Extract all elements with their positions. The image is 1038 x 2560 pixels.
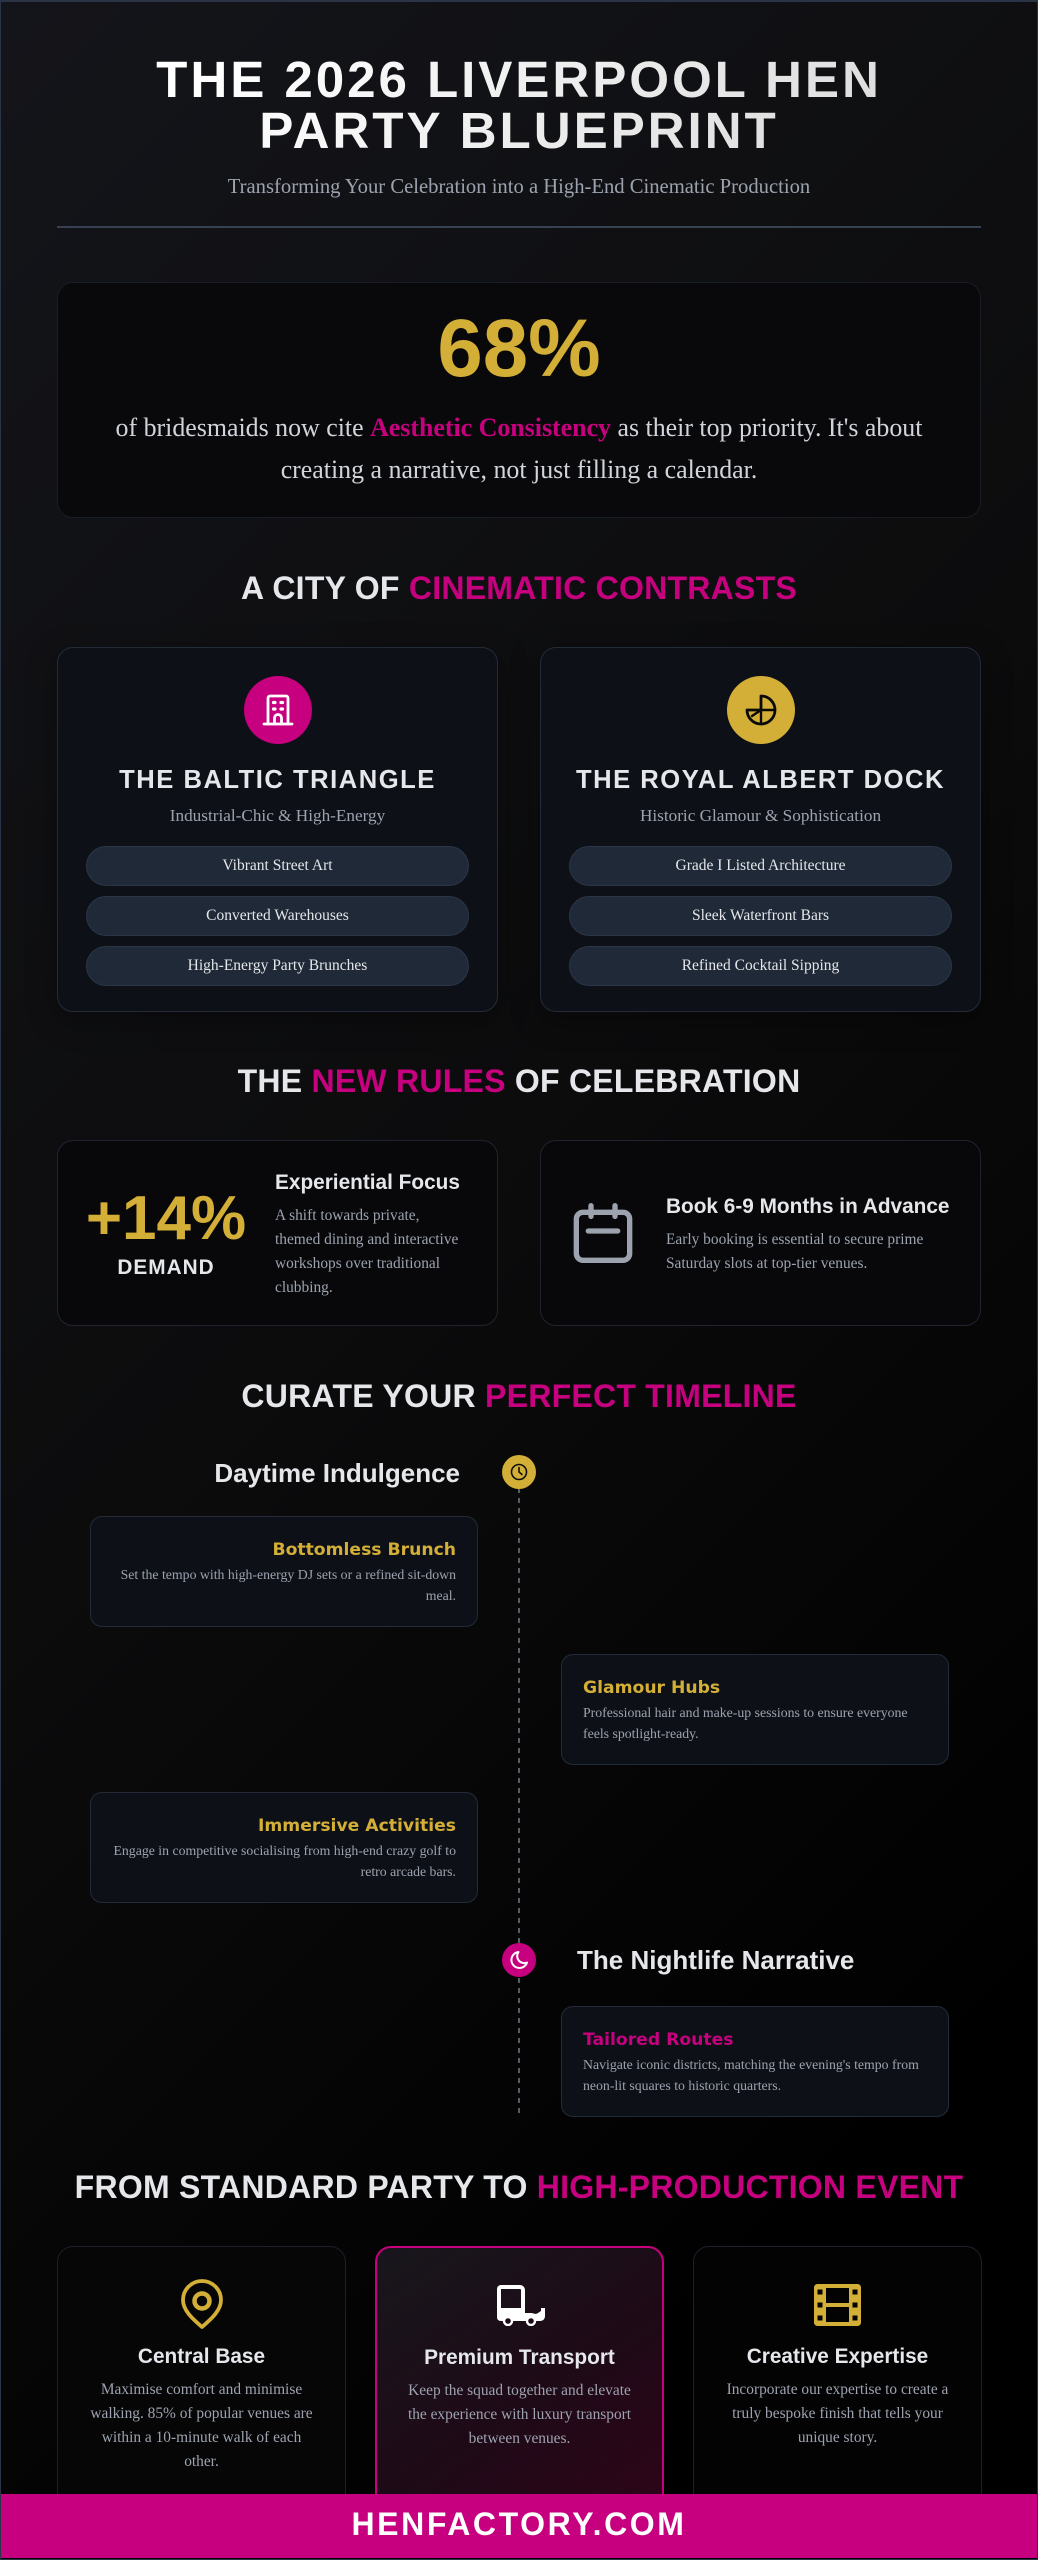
pill: grade I listed architecture	[569, 846, 952, 886]
panel: central base	[57, 2246, 346, 2516]
big number 68%: 68%	[437, 303, 601, 394]
card title: Tailored Routes	[583, 2030, 734, 2050]
pill: vibrant street art	[86, 846, 469, 886]
card body: meal.	[426, 1588, 456, 1602]
card body: other.	[184, 2453, 219, 2470]
card body	[121, 1567, 456, 1602]
text body: themed dining and interactive	[275, 1231, 458, 1248]
text body: A shift towards private,	[275, 1207, 419, 1224]
text body	[666, 1231, 923, 1272]
text body: Early booking is essential to secure prime	[666, 1231, 923, 1248]
card body: neon-lit squares to historic quarters.	[583, 2078, 781, 2092]
card body	[727, 2381, 948, 2446]
card title: Creative Expertise	[747, 2345, 928, 2368]
panel: book in advance	[540, 1140, 981, 1326]
subtitle: Transforming Your Celebration into a High-End Cinematic Production	[228, 176, 810, 198]
heading: daytime indulgence: Daytime Indulgence	[214, 1458, 460, 1488]
panel: the baltic triangle	[57, 647, 498, 1012]
pill: sleek waterfront bars: Sleek Waterfront Bars	[692, 907, 829, 924]
text title: Experiential Focus	[275, 1171, 460, 1194]
card subtitle: Industrial-Chic & High-Energy	[170, 806, 385, 825]
pill: converted warehouses	[86, 896, 469, 936]
card title: Immersive Activities	[258, 1816, 456, 1836]
icon: film strip	[814, 2284, 861, 2326]
text body: clubbing.	[275, 1279, 333, 1296]
panel: premium transport	[375, 2246, 664, 2516]
card body: Keep the squad together and elevate	[408, 2382, 631, 2399]
card title: Premium Transport	[424, 2346, 615, 2369]
heading: new rules of celebration: THE NEW RULES OF CELEBRATION	[238, 1063, 800, 1099]
heading: city of cinematic contrasts: A CITY OF CINEMATIC CONTRASTS	[241, 570, 797, 606]
pill: grade I listed architecture: Grade I Listed Architecture	[676, 857, 846, 874]
heading: the nightlife narrative: The Nightlife Narrative	[577, 1945, 854, 1975]
icon: moon marker	[502, 1943, 536, 1977]
card body: Engage in competitive socialising from high-end crazy golf to	[113, 1843, 456, 1858]
panel: the royal albert dock	[540, 647, 981, 1012]
title: PARTY BLUEPRINT	[259, 102, 779, 159]
card body: walking. 85% of popular venues are	[90, 2405, 313, 2422]
heading: high-production event: FROM STANDARD PARTY TO HIGH-PRODUCTION EVENT	[75, 2169, 963, 2205]
panel: creative expertise	[693, 2246, 982, 2516]
timeline card: bottomless brunch	[90, 1516, 478, 1627]
icon: building	[244, 676, 312, 744]
pill: high-energy party brunches: High-Energy Party Brunches	[188, 957, 367, 974]
statistic description: creating a narrative, not just filling a calendar.	[281, 455, 757, 484]
card body: Maximise comfort and minimise	[101, 2381, 302, 2398]
label demand: DEMAND	[117, 1256, 215, 1279]
icon: map pin	[181, 2279, 223, 2329]
pill: vibrant street art: Vibrant Street Art	[222, 857, 333, 874]
pill: converted warehouses: Converted Warehouses	[206, 907, 349, 924]
footer banner: HENFACTORY.COM	[351, 2506, 687, 2542]
card body: Navigate iconic districts, matching the evening's tempo from	[583, 2057, 919, 2072]
card title: THE ROYAL ALBERT DOCK	[576, 766, 945, 794]
heading: curate your perfect timeline: CURATE YOUR PERFECT TIMELINE	[241, 1378, 797, 1414]
card body: the experience with luxury transport	[408, 2406, 631, 2423]
text body	[275, 1207, 458, 1296]
statistic description	[116, 413, 922, 484]
icon: clock marker	[502, 1455, 536, 1489]
panel: headline statistic	[57, 282, 981, 518]
title: THE 2026 LIVERPOOL HEN	[156, 51, 882, 108]
card body: retro arcade bars.	[361, 1864, 456, 1878]
card body: between venues.	[469, 2430, 570, 2447]
number +14%: +14%	[86, 1184, 246, 1253]
card title: Bottomless Brunch	[272, 1540, 456, 1560]
text body: workshops over traditional	[275, 1255, 440, 1272]
card body	[113, 1843, 456, 1878]
card body: truly bespoke finish that tells your	[732, 2405, 943, 2422]
timeline spine	[518, 1489, 520, 2113]
pill: refined cocktail sipping: Refined Cocktail Sipping	[682, 957, 839, 974]
card title: Glamour Hubs	[583, 1678, 720, 1698]
icon: truck	[497, 2285, 545, 2326]
timeline card: glamour hubs	[561, 1654, 949, 1765]
card body: within a 10-minute walk of each	[102, 2429, 301, 2446]
card body: Incorporate our expertise to create a	[727, 2381, 948, 2398]
card body	[408, 2382, 631, 2447]
card body	[583, 1705, 908, 1741]
card title: THE BALTIC TRIANGLE	[119, 766, 436, 794]
footer banner	[1, 2494, 1037, 2558]
card body: Professional hair and make-up sessions to ensure everyone	[583, 1705, 908, 1720]
card body: Set the tempo with high-energy DJ sets or a refined sit-down	[121, 1567, 456, 1582]
card body	[90, 2381, 313, 2470]
pill: sleek waterfront bars	[569, 896, 952, 936]
timeline card: tailored routes	[561, 2006, 949, 2117]
panel: experiential focus	[57, 1140, 498, 1326]
card title: Central Base	[138, 2345, 265, 2368]
icon: quartered circle	[727, 676, 795, 744]
statistic description: of bridesmaids now cite Aesthetic Consistency as their top priority. It's about	[116, 413, 922, 442]
title	[1, 54, 1037, 156]
pill: refined cocktail sipping	[569, 946, 952, 986]
icon: calendar	[574, 1203, 632, 1263]
stat: +14% demand	[86, 1184, 246, 1279]
card body: feels spotlight-ready.	[583, 1726, 699, 1740]
card body	[583, 2057, 919, 2093]
text title: Book 6-9 Months in Advance	[666, 1195, 950, 1218]
timeline card: immersive activities	[90, 1792, 478, 1903]
pill: high-energy party brunches	[86, 946, 469, 986]
card subtitle: Historic Glamour & Sophistication	[640, 806, 881, 825]
card body: unique story.	[798, 2429, 877, 2446]
text body: Saturday slots at top-tier venues.	[666, 1255, 867, 1272]
